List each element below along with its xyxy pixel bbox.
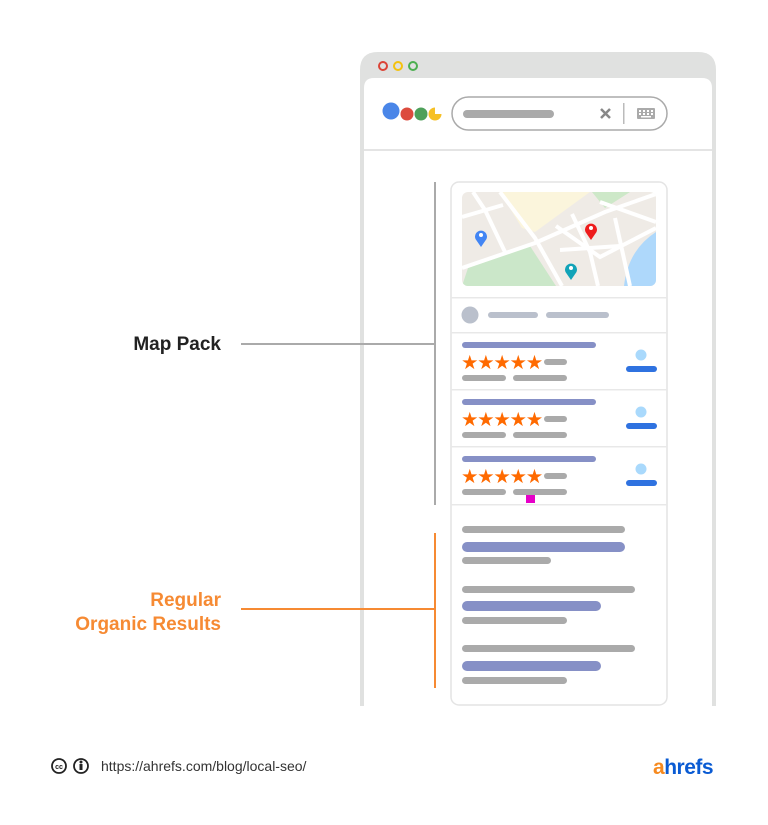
organic label [75, 533, 436, 688]
map [462, 192, 656, 286]
filter row [462, 306, 609, 324]
logo dots [382, 102, 442, 120]
listing 3 [461, 456, 657, 503]
browser frame [360, 52, 716, 706]
footer license icons [52, 759, 88, 773]
organic label: Regular [150, 590, 222, 611]
map pack label: Map Pack [133, 334, 221, 355]
organic label: Organic Results [75, 614, 221, 635]
ahrefs logo: ahrefs [653, 756, 713, 779]
map pack card [451, 182, 667, 705]
listing 2: ★★★★★ [461, 409, 543, 431]
search bar [452, 97, 667, 130]
footer license icons: cc [55, 764, 63, 771]
listing 1: ★★★★★ [461, 352, 543, 374]
listing 2 [461, 399, 657, 438]
organic results [462, 526, 635, 684]
listing 3: ★★★★★ [461, 466, 543, 488]
listing 1 [461, 342, 657, 381]
url: https://ahrefs.com/blog/local-seo/ [101, 758, 307, 774]
